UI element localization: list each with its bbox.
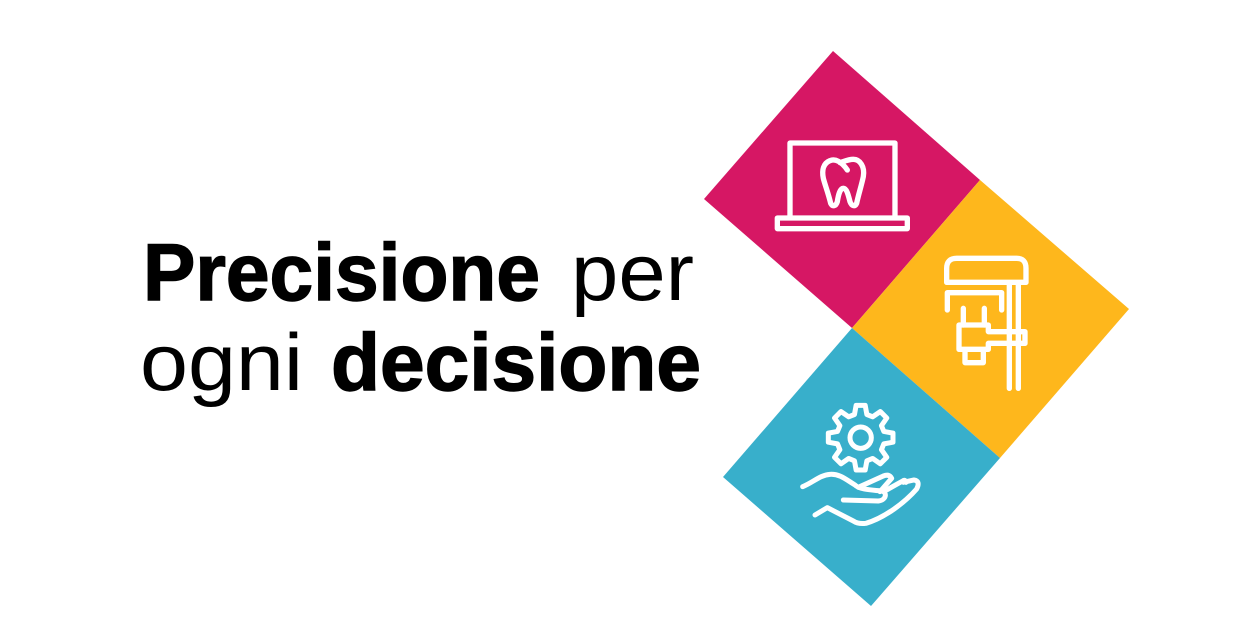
- icon: laptop with tooth: [777, 143, 907, 229]
- title: per: [571, 228, 694, 318]
- icon: gear over open hand: [803, 405, 918, 524]
- panel: blue diamond: [723, 328, 1000, 606]
- title: Precisione: [143, 228, 540, 318]
- icon: dental scanner: [947, 258, 1026, 388]
- panel: yellow diamond: [852, 180, 1129, 458]
- title: ogni: [140, 318, 303, 408]
- title: [140, 228, 701, 408]
- title: decisione: [331, 318, 701, 408]
- panel: magenta diamond: [704, 51, 980, 328]
